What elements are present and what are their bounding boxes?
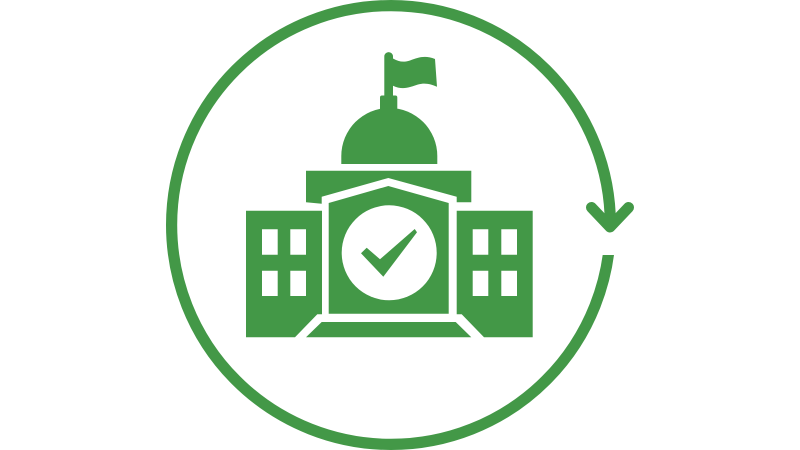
flag pole [384, 52, 393, 97]
ring [172, 6, 610, 444]
flag [393, 57, 437, 88]
left wing with windows [246, 211, 322, 337]
building icon [246, 52, 533, 337]
check badge [342, 205, 437, 300]
central portico [329, 186, 449, 314]
badge circle [342, 205, 437, 300]
roof band [306, 171, 471, 204]
arrowhead [592, 208, 628, 227]
right wing with windows [457, 211, 533, 337]
dome [341, 108, 437, 164]
check mark [361, 229, 417, 277]
circular arrow ring [172, 6, 630, 444]
entrance steps [306, 322, 471, 337]
dome cap [380, 96, 397, 109]
